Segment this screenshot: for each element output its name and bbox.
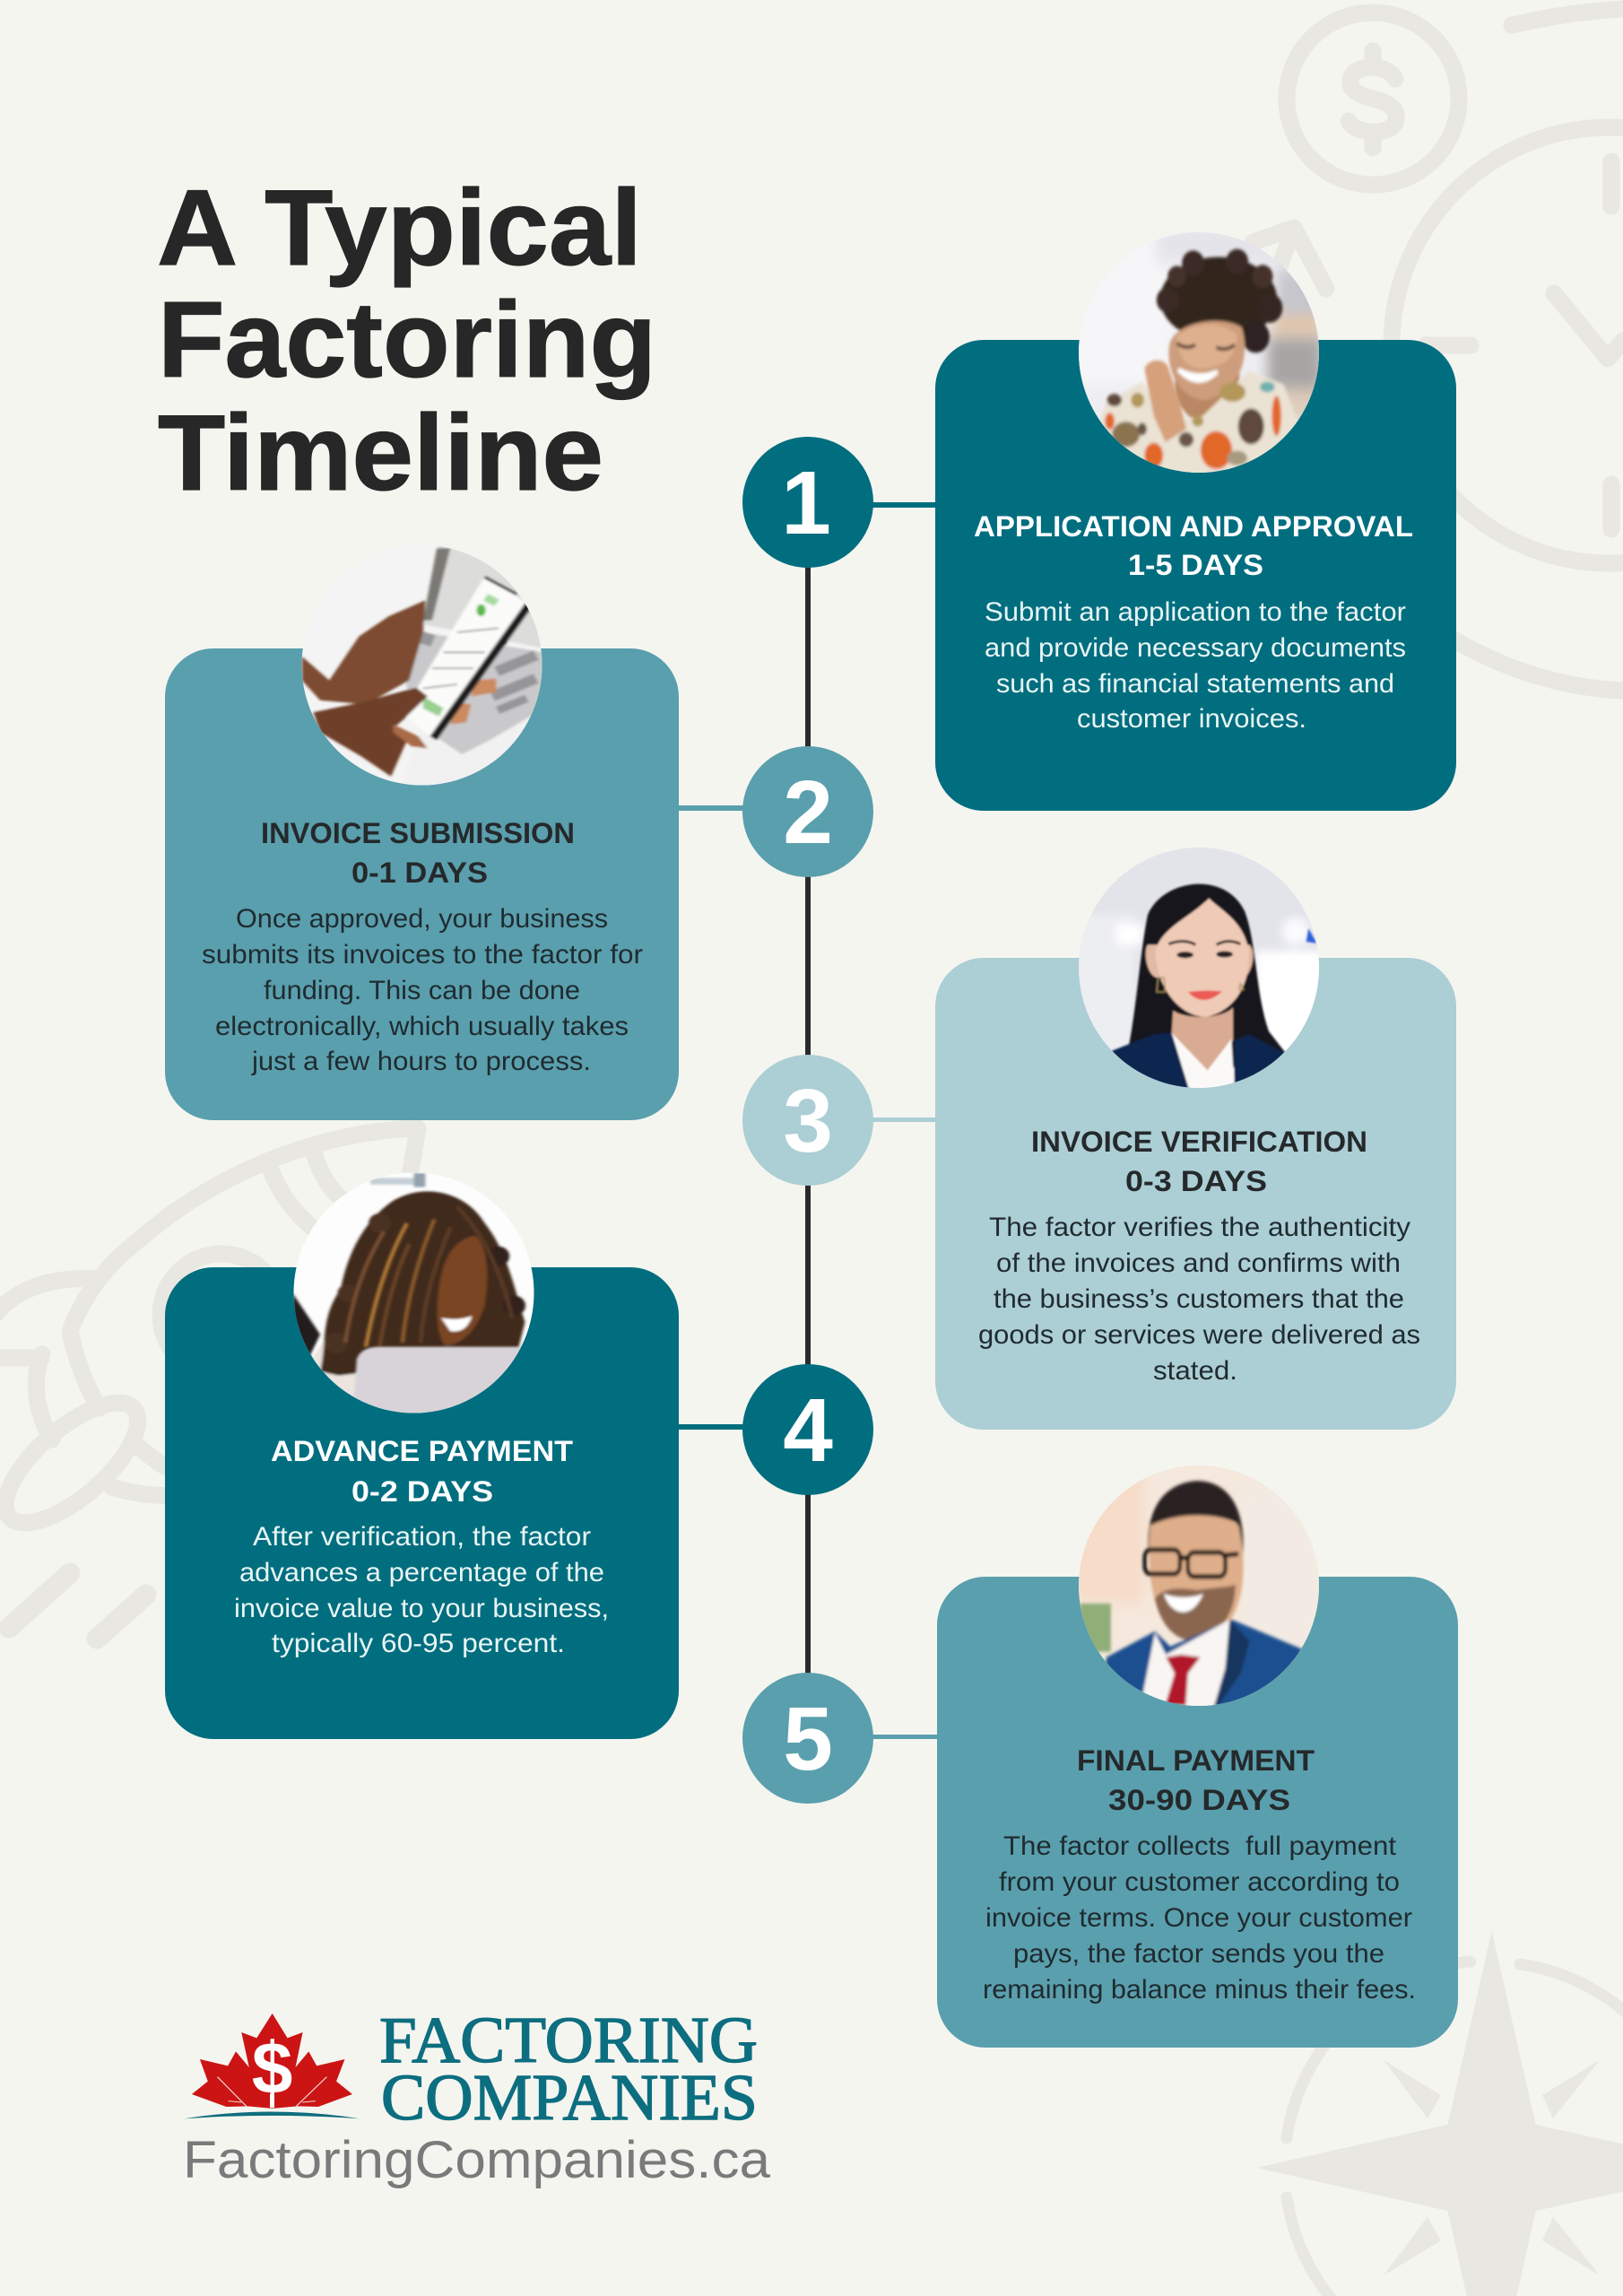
heading: ADVANCE PAYMENT <box>271 1435 573 1467</box>
body text: Once approved, your business <box>236 904 608 934</box>
body text: submits its invoices to the factor for <box>202 940 643 970</box>
body text: pays, the factor sends you the <box>1013 1939 1384 1969</box>
timeline vertical line <box>805 502 811 1737</box>
heading: 1-5 DAYS <box>1128 549 1263 581</box>
body text <box>234 1522 609 1658</box>
heading: INVOICE SUBMISSION <box>261 817 575 849</box>
body text: The factor collects full payment <box>1003 1831 1397 1861</box>
panel: advance payment <box>165 1166 679 1739</box>
step 5 number: 5 <box>783 1689 833 1789</box>
photo: smiling man with glasses in blue suit <box>1073 1458 1324 1711</box>
body text <box>202 904 643 1076</box>
photo: woman with curly hair at laptop <box>294 1173 534 1413</box>
step 3 number: 3 <box>783 1071 833 1171</box>
connector 2 <box>677 805 745 811</box>
step 5 number <box>742 1673 873 1804</box>
step 4 number <box>742 1364 873 1495</box>
icon: red maple leaf with dollar sign: $ <box>252 2028 292 2109</box>
body text: from your customer according to <box>999 1867 1400 1897</box>
background icon: rocket <box>0 1128 418 1639</box>
step 2 number <box>742 746 873 877</box>
body text: of the invoices and confirms with <box>996 1248 1401 1278</box>
body text: funding. This can be done <box>264 976 580 1005</box>
background icon: coin with dollar sign <box>1287 13 1459 185</box>
body text: stated. <box>1153 1356 1237 1386</box>
body text: such as financial statements and <box>996 669 1394 699</box>
website URL: FactoringCompanies.ca <box>183 2131 771 2189</box>
title: A Typical <box>157 168 642 288</box>
body text: just a few hours to process. <box>251 1047 591 1076</box>
connector 4 <box>677 1424 745 1430</box>
heading: 30-90 DAYS <box>1108 1784 1290 1816</box>
body text <box>983 1831 1416 2005</box>
heading: 0-2 DAYS <box>352 1475 493 1508</box>
background icon: compass star <box>1256 1931 1623 2296</box>
body text: The factor verifies the authenticity <box>989 1213 1410 1242</box>
heading <box>974 510 1413 581</box>
background icon: clock <box>1392 9 1623 691</box>
panel: invoice verification <box>935 843 1456 1430</box>
body text: invoice terms. Once your customer <box>985 1903 1412 1933</box>
heading: FINAL PAYMENT <box>1077 1744 1315 1777</box>
step 2 number: 2 <box>783 762 833 863</box>
logo wordmark: FACTORING <box>379 2004 758 2076</box>
heading <box>261 817 575 889</box>
heading: 0-1 DAYS <box>352 857 488 889</box>
title: Timeline <box>158 393 603 513</box>
icon: red maple leaf with dollar sign <box>184 2013 360 2118</box>
background icon: growth arrow <box>1254 228 1326 332</box>
body text: invoice value to your business, <box>234 1594 609 1623</box>
heading: 0-3 DAYS <box>1125 1165 1267 1197</box>
body text <box>978 1213 1420 1386</box>
connector 5 <box>870 1735 939 1739</box>
logo: Factoring Companies <box>183 2004 771 2189</box>
step 1 number <box>742 437 873 568</box>
body text: advances a percentage of the <box>239 1558 604 1587</box>
logo wordmark <box>379 2004 758 2134</box>
heading <box>271 1435 573 1508</box>
step 1 number: 1 <box>781 453 831 553</box>
step 4 number: 4 <box>783 1380 833 1481</box>
connector 3 <box>870 1118 937 1122</box>
body text: customer invoices. <box>1077 704 1306 734</box>
photo: hands holding smartphone over laptop <box>301 546 542 786</box>
body text: and provide necessary documents <box>985 633 1406 663</box>
photo: smiling woman in patterned blouse <box>1072 226 1323 479</box>
panel: final payment <box>937 1458 1458 2048</box>
heading <box>1031 1126 1367 1197</box>
body text: electronically, which usually takes <box>215 1012 629 1041</box>
body text: After verification, the factor <box>253 1522 591 1552</box>
heading <box>1077 1744 1315 1816</box>
body text: goods or services were delivered as <box>978 1320 1420 1350</box>
body text: remaining balance minus their fees. <box>983 1975 1416 2005</box>
body text <box>985 597 1406 734</box>
title: Factoring <box>158 280 656 400</box>
logo wordmark: COMPANIES <box>381 2061 758 2134</box>
step 3 number <box>742 1055 873 1186</box>
connector 1 <box>870 502 937 508</box>
photo: woman with long dark hair in navy blazer <box>1076 843 1327 1094</box>
body text: the business’s customers that the <box>994 1284 1404 1314</box>
heading: APPLICATION AND APPROVAL <box>974 510 1413 543</box>
title <box>157 168 656 513</box>
heading: INVOICE VERIFICATION <box>1031 1126 1367 1158</box>
body text: Submit an application to the factor <box>985 597 1406 627</box>
panel: application and approval <box>935 226 1456 811</box>
body text: typically 60-95 percent. <box>272 1629 565 1658</box>
panel: invoice submission <box>165 540 679 1120</box>
